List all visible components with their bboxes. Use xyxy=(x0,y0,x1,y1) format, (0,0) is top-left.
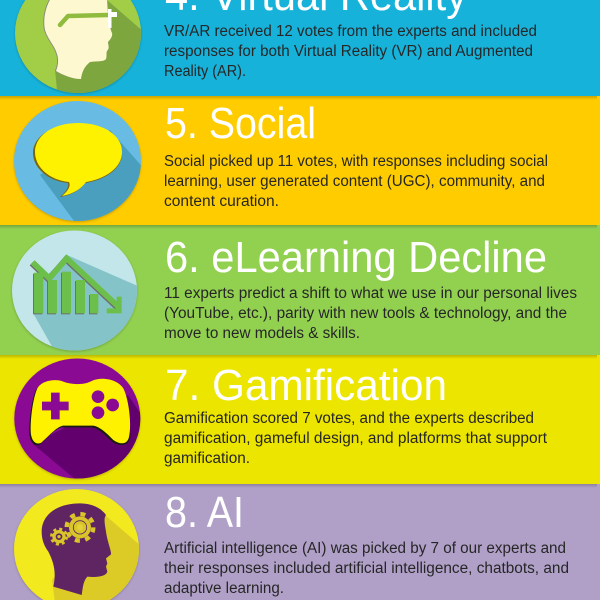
text block: 11 experts predict a shift to what we use in our personal lives xyxy=(164,285,577,302)
title: 6. eLearning Decline xyxy=(165,233,547,282)
title: 7. Gamification xyxy=(165,361,447,410)
panel: 6. eLearning Decline xyxy=(0,225,600,355)
text block: (YouTube, etc.), parity with new tools & technology, and the xyxy=(164,305,567,322)
text block: their responses included artificial intelligence, chatbots, and xyxy=(164,560,569,577)
text block xyxy=(164,410,548,467)
text block: Reality (AR). xyxy=(164,63,246,80)
text block: VR/AR received 12 votes from the experts and included xyxy=(164,23,537,40)
text block: gamification, gameful design, and platforms that support xyxy=(164,430,548,447)
panel: 4. Virtual Reality xyxy=(0,0,600,100)
text block: Artificial intelligence (AI) was picked by 7 of our experts and xyxy=(164,540,566,557)
text block: gamification. xyxy=(164,450,250,467)
text block: responses for both Virtual Reality (VR) and Augmented xyxy=(164,43,533,60)
panel: 8. AI xyxy=(0,484,600,600)
title: 8. AI xyxy=(165,488,244,537)
icon: head with gears xyxy=(14,489,142,600)
text block xyxy=(164,23,537,80)
panel: 5. Social xyxy=(0,96,600,225)
text block xyxy=(164,153,548,210)
icon: game controller xyxy=(14,358,145,485)
text block: content curation. xyxy=(164,193,279,210)
text block: Social picked up 11 votes, with responses including social xyxy=(164,153,548,170)
text block: Gamification scored 7 votes, and the experts described xyxy=(164,410,534,427)
text block: learning, user generated content (UGC), community, and xyxy=(164,173,545,190)
text block xyxy=(164,540,569,597)
icon: head with smart glasses xyxy=(15,0,145,100)
icon: declining bar chart xyxy=(12,230,140,355)
panel: 7. Gamification xyxy=(0,355,600,485)
text block: adaptive learning. xyxy=(164,580,284,597)
text block: move to new models & skills. xyxy=(164,325,360,342)
icon: speech bubble xyxy=(14,101,145,225)
title: 5. Social xyxy=(165,99,316,148)
text block xyxy=(164,285,577,342)
